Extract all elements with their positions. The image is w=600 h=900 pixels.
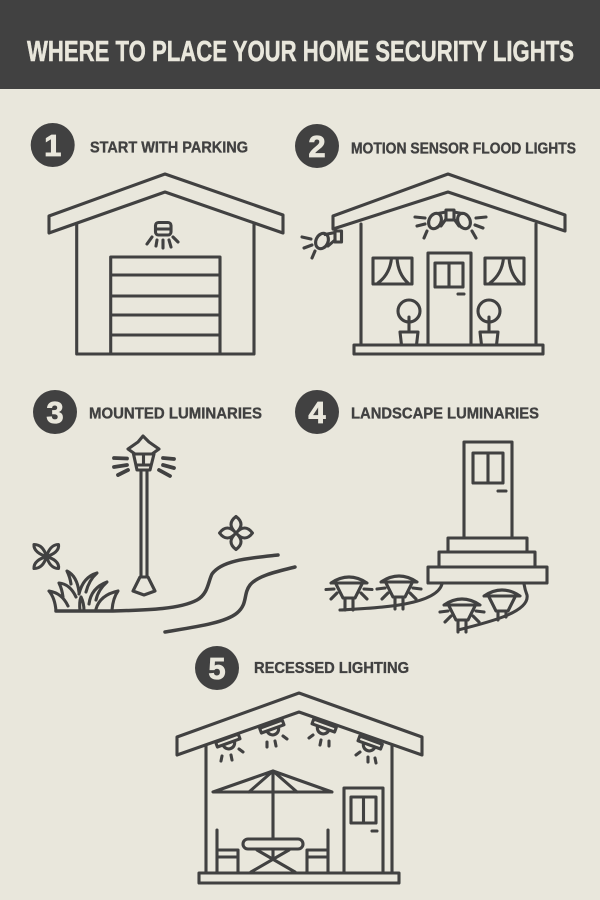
number badge 3	[33, 390, 77, 434]
panel: 4 landscape luminaries	[295, 390, 547, 632]
number badge 2: 2	[308, 129, 326, 164]
title banner	[0, 0, 600, 89]
panel: 3 mounted luminaries	[33, 390, 295, 632]
icon: recessed light 3	[305, 719, 336, 753]
icon: garden light 2	[377, 576, 421, 609]
icon: umbrella	[213, 771, 332, 839]
number badge 1: 1	[44, 128, 61, 163]
icon: recessed light 4	[351, 736, 383, 769]
number badge 1	[31, 123, 75, 167]
heading: start with parking: START WITH PARKING	[90, 140, 248, 156]
icon: grass	[49, 571, 118, 611]
heading: landscape luminaries: LANDSCAPE LUMINARIES	[351, 406, 539, 422]
icon: flower right	[220, 516, 252, 550]
icon: table	[243, 839, 303, 872]
icon: garden light 4	[484, 590, 520, 620]
number badge 4	[295, 390, 339, 434]
icon: garage light	[147, 222, 178, 248]
icon: chair right	[307, 830, 328, 873]
number badge 2	[295, 124, 339, 168]
panel: 5 recessed lighting	[177, 646, 422, 883]
path edges	[56, 555, 295, 632]
icon: door and steps	[428, 442, 547, 583]
icon: garage	[49, 174, 283, 354]
icon: patio house	[177, 693, 422, 883]
icon: lamp post	[114, 436, 174, 595]
icon: recessed light 2	[260, 720, 291, 754]
number badge 4: 4	[308, 395, 326, 430]
heading: motion sensor flood lights: MOTION SENSOR FLOOD LIGHTS	[351, 140, 576, 158]
icon: flower left	[34, 544, 59, 568]
icon: side flood light	[302, 231, 342, 258]
number badge 3: 3	[46, 395, 64, 430]
panel: 2 motion sensor flood lights	[295, 124, 576, 354]
icon: twin flood light	[415, 210, 486, 238]
icon: garden light 3	[440, 599, 484, 632]
heading: mounted luminaries: MOUNTED LUMINARIES	[89, 406, 262, 422]
icon: chair left	[217, 830, 238, 873]
icon: house	[302, 174, 565, 354]
panel: 1 start with parking	[31, 123, 283, 354]
heading: recessed lighting: RECESSED LIGHTING	[254, 660, 409, 677]
icon: recessed light 1	[214, 734, 247, 768]
number badge 5	[195, 646, 239, 690]
garden path lines	[340, 584, 527, 630]
icon: garden light 1	[326, 577, 372, 610]
number badge 5: 5	[208, 651, 226, 686]
